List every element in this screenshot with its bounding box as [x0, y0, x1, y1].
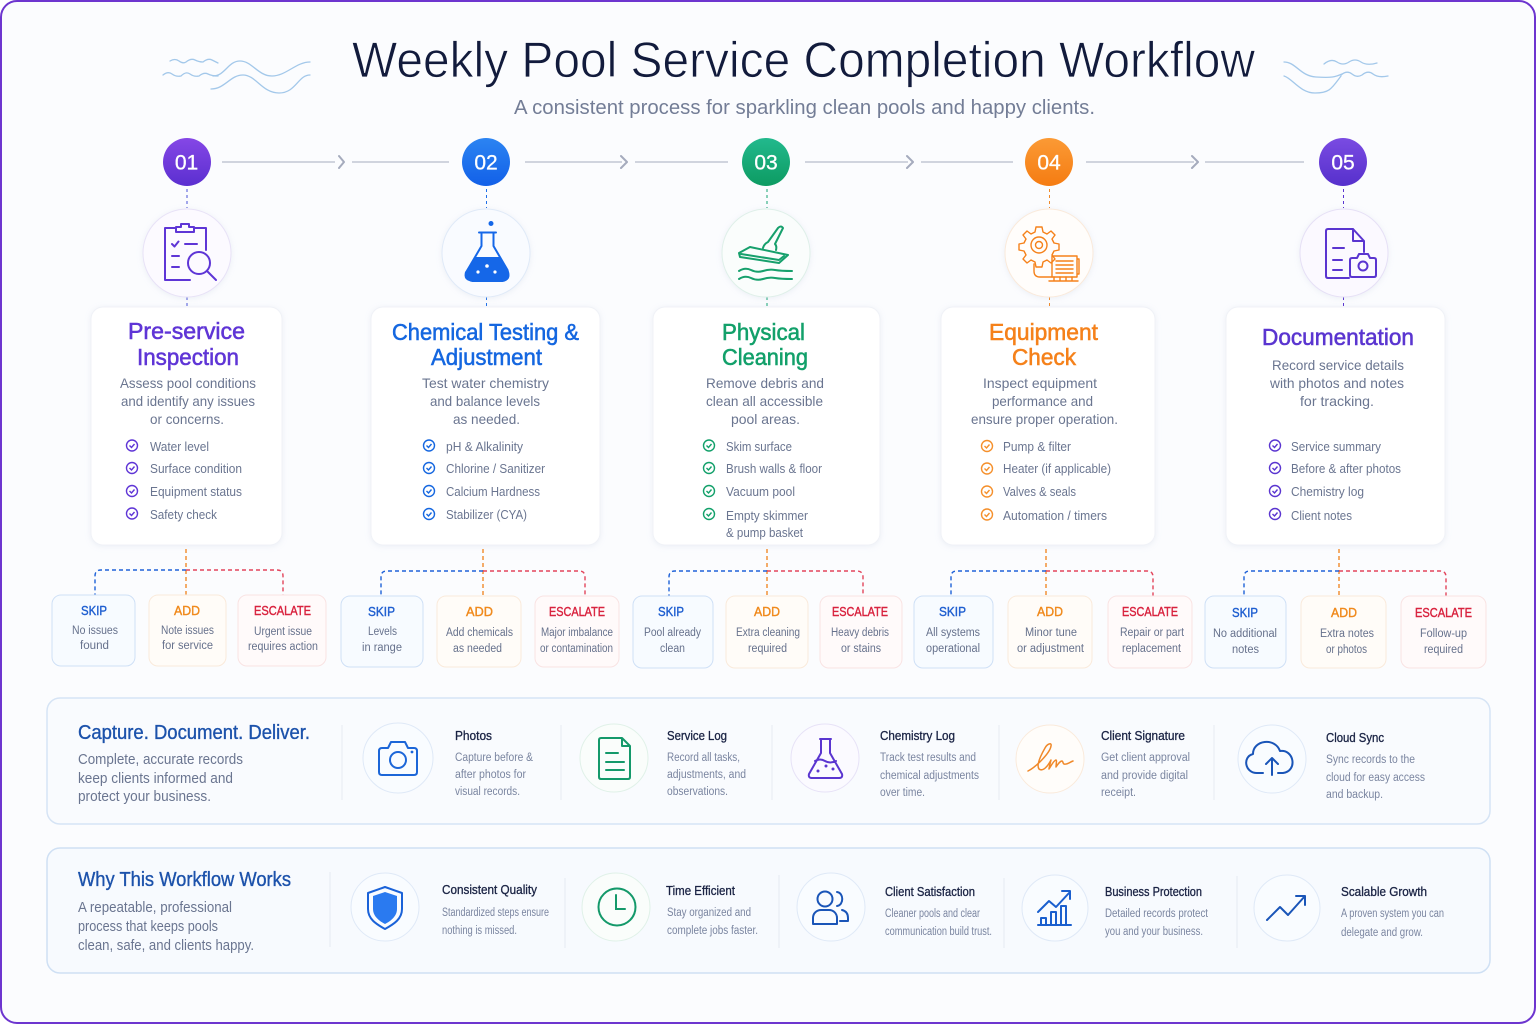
decision boxes step 01: for service [162, 640, 213, 652]
card: Physical Cleaning: Remove debris and [706, 375, 824, 391]
item: Time Efficient: complete jobs faster. [667, 925, 758, 937]
decision boxes step 02: or contamination [540, 643, 613, 655]
card: Documentation: Record service details [1272, 357, 1404, 373]
decision boxes step 01: found [80, 640, 109, 652]
decision boxes step 02: Levels [368, 626, 397, 638]
item: Chemistry Log: Chemistry Log [880, 729, 955, 743]
card: Equipment Check: ensure proper operation. [971, 411, 1118, 427]
decision boxes step 01: No issues [72, 625, 118, 637]
panel heading [78, 722, 310, 805]
item: Service Log: Service Log [667, 729, 727, 743]
item: Cloud Sync: Sync records to the [1326, 754, 1415, 766]
card: Equipment Check: Inspect equipment [983, 375, 1097, 391]
card: Equipment Check: Equipment [989, 319, 1099, 345]
decision boxes step 02: as needed [453, 643, 502, 655]
decision boxes step 03: required [748, 643, 787, 655]
decision boxes step 04 [914, 596, 1192, 668]
decision boxes step 05: ADD [1331, 606, 1357, 620]
decision boxes step 02: ESCALATE [549, 605, 605, 619]
item: Consistent Quality: Consistent Quality [442, 883, 538, 897]
item: Service Log: Record all tasks, [667, 752, 740, 764]
item: Chemistry Log: Track test results and [880, 752, 976, 764]
decision boxes step 05: Follow-up [1420, 628, 1467, 640]
card: Documentation: for tracking. [1300, 393, 1374, 409]
item: Client Signature: Get client approval [1101, 752, 1190, 764]
card: Equipment Check [941, 307, 1155, 545]
step 03 column [653, 138, 880, 545]
decision boxes step 05: notes [1232, 644, 1259, 656]
panel: Why This Workflow Works [47, 848, 1490, 973]
step 04 column [941, 138, 1155, 545]
icon: pool vacuum [722, 209, 810, 297]
card: Documentation: with photos and notes [1269, 375, 1404, 391]
card: Physical Cleaning: Vacuum pool [726, 485, 795, 499]
card: Equipment Check: Pump & filter [1003, 440, 1071, 454]
title: Weekly Pool Service Completion Workflow [352, 32, 1256, 88]
icon: flask [442, 209, 530, 297]
decision boxes step 05: No additional [1213, 628, 1277, 640]
panel heading: protect your business. [78, 789, 211, 805]
card: Pre-service Inspection: Pre-service [128, 318, 245, 344]
card: Chemical Testing & Adjustment: and balance levels [430, 393, 540, 409]
item: Chemistry Log [791, 724, 979, 799]
decision boxes step 01: requires action [248, 641, 318, 653]
card: Pre-service Inspection [91, 307, 282, 545]
decision boxes step 02: Add chemicals [446, 627, 513, 639]
panel heading: process that keeps pools [78, 919, 218, 935]
step number 01 [163, 138, 211, 186]
card: Chemical Testing & Adjustment: Chemical Testing & [392, 319, 579, 345]
card: Physical Cleaning: clean all accessible [706, 393, 823, 409]
card: Documentation: Client notes [1291, 509, 1352, 523]
card: Chemical Testing & Adjustment: as needed. [453, 411, 520, 427]
card: Physical Cleaning: & pump basket [726, 526, 803, 540]
icon: gear and pump [1005, 209, 1093, 297]
decision boxes step 02: in range [362, 642, 402, 654]
decision boxes step 03: Heavy debris [831, 627, 889, 639]
item: Business Protection: Business Protection [1105, 885, 1202, 899]
decision boxes step 04: SKIP [939, 605, 966, 619]
card: Documentation [1226, 307, 1445, 545]
decision boxes step 03 [633, 596, 902, 668]
item: Service Log [580, 724, 746, 798]
item: Scalable Growth: delegate and grow. [1341, 927, 1423, 939]
icon: document with camera [1300, 209, 1388, 297]
step 02 column [371, 138, 600, 545]
step number 03: 03 [754, 152, 778, 174]
decision boxes step 03: or stains [841, 643, 881, 655]
item: Cloud Sync [1238, 725, 1425, 801]
item: Business Protection [1022, 875, 1209, 941]
item: Time Efficient: Stay organized and [667, 907, 751, 919]
card: Documentation: Documentation [1262, 324, 1414, 350]
item: Client Satisfaction: Cleaner pools and clear [885, 908, 980, 920]
decision boxes step 01: Note issues [161, 625, 214, 637]
card: Physical Cleaning: pool areas. [731, 411, 800, 427]
card: Physical Cleaning: Physical [722, 319, 805, 345]
panel heading: keep clients informed and [78, 771, 233, 787]
item: Client Signature [1016, 725, 1190, 799]
card: Pre-service Inspection: Equipment status [150, 485, 242, 499]
decision boxes step 04: or adjustment [1017, 643, 1085, 655]
panel heading: A repeatable, professional [78, 900, 232, 916]
decision boxes step 05: required [1424, 644, 1463, 656]
decorative waves left [163, 59, 310, 93]
item: Scalable Growth: A proven system you can [1341, 908, 1444, 920]
card: Equipment Check: Heater (if applicable) [1003, 462, 1111, 476]
card: Pre-service Inspection: and identify any issues [121, 393, 255, 409]
decision boxes step 04: All systems [926, 627, 980, 639]
item: Client Satisfaction: Client Satisfaction [885, 885, 975, 899]
decision boxes step 05: ESCALATE [1415, 606, 1472, 620]
card: Pre-service Inspection: or concerns. [150, 411, 224, 427]
card: Physical Cleaning: Empty skimmer [726, 509, 808, 523]
step 05 column [1226, 138, 1445, 545]
decision boxes step 01 [52, 595, 326, 666]
panel heading: Capture. Document. Deliver. [78, 722, 310, 744]
card: Chemical Testing & Adjustment [371, 307, 600, 545]
subtitle: A consistent process for sparkling clean pools and happy clients. [514, 97, 1095, 119]
icon: clipboard inspection [143, 209, 231, 297]
decision boxes step 04: Repair or part [1120, 627, 1185, 639]
decorative waves right [1284, 60, 1388, 93]
card: Physical Cleaning: Cleaning [722, 344, 808, 370]
decision boxes step 05: Extra notes [1320, 628, 1374, 640]
card: Equipment Check: Valves & seals [1003, 485, 1076, 499]
item: Client Signature: receipt. [1101, 787, 1136, 799]
decision boxes step 03: ESCALATE [832, 605, 888, 619]
panel heading [78, 869, 291, 954]
card: Documentation: Service summary [1291, 440, 1382, 454]
panel heading: Complete, accurate records [78, 752, 243, 768]
panel: Capture. Document. Deliver. [47, 698, 1490, 824]
card: Chemical Testing & Adjustment: Adjustment [431, 344, 543, 370]
decision boxes step 04: Minor tune [1025, 627, 1077, 639]
item: Photos: after photos for [455, 769, 526, 781]
card: Chemical Testing & Adjustment: Test water chemistry [422, 375, 549, 391]
step number 02: 02 [474, 152, 498, 174]
card: Physical Cleaning [653, 307, 880, 545]
decision boxes step 03: Pool already [644, 627, 701, 639]
decision boxes step 02: SKIP [368, 605, 395, 619]
item: Client Signature: Client Signature [1101, 729, 1185, 743]
card: Pre-service Inspection: Water level [150, 440, 209, 454]
decision boxes step 04: ESCALATE [1122, 605, 1178, 619]
panel heading: Why This Workflow Works [78, 869, 291, 891]
step number 01: 01 [175, 152, 198, 174]
item: Service Log: adjustments, and [667, 769, 746, 781]
item: Cloud Sync: cloud for easy access [1326, 772, 1425, 784]
card: Physical Cleaning: Skim surface [726, 440, 792, 454]
decision boxes step 03: clean [660, 643, 685, 655]
panel heading: clean, safe, and clients happy. [78, 938, 254, 954]
item: Cloud Sync: Cloud Sync [1326, 731, 1384, 745]
step number 05: 05 [1331, 152, 1355, 174]
decision boxes step 03: ADD [754, 605, 780, 619]
card: Chemical Testing & Adjustment: Calcium Hardness [446, 485, 540, 499]
item: Business Protection: you and your business. [1105, 926, 1203, 938]
decision boxes step 05 [1205, 596, 1486, 668]
decision boxes step 02 [341, 596, 619, 667]
card: Equipment Check: Check [1012, 344, 1076, 370]
item: Chemistry Log: chemical adjustments [880, 770, 979, 782]
item: Scalable Growth [1254, 875, 1444, 941]
step number 03 [742, 138, 790, 186]
card: Physical Cleaning: Brush walls & floor [726, 462, 822, 476]
decision boxes step 04: operational [926, 643, 980, 655]
card: Pre-service Inspection: Safety check [150, 508, 218, 522]
decision boxes step 01: ESCALATE [254, 604, 311, 618]
decision boxes step 05: or photos [1326, 644, 1367, 656]
step number 04: 04 [1037, 152, 1061, 174]
item: Service Log: observations. [667, 786, 728, 798]
item: Time Efficient [582, 873, 758, 941]
item: Business Protection: Detailed records protect [1105, 908, 1209, 920]
card: Documentation: Before & after photos [1291, 462, 1401, 476]
item: Photos: Capture before & [455, 752, 533, 764]
decision boxes step 01: SKIP [81, 604, 107, 618]
step number 05 [1319, 138, 1367, 186]
step 01 column [91, 138, 282, 545]
item: Client Satisfaction: communication build trust. [885, 926, 992, 938]
item: Time Efficient: Time Efficient [666, 884, 735, 898]
item: Client Satisfaction [797, 873, 992, 941]
item: Photos: Photos [455, 729, 492, 743]
timeline arrows [222, 156, 1304, 168]
card: Equipment Check: Automation / timers [1003, 509, 1107, 523]
card: Chemical Testing & Adjustment: Stabilizer (CYA) [446, 508, 527, 522]
decision connectors [95, 549, 1446, 596]
card: Documentation: Chemistry log [1291, 485, 1364, 499]
item: Cloud Sync: and backup. [1326, 789, 1383, 801]
card: Pre-service Inspection: Inspection [137, 344, 239, 370]
decision boxes step 03: SKIP [658, 605, 684, 619]
step number 04 [1025, 138, 1073, 186]
card: Chemical Testing & Adjustment: Chlorine / Sanitizer [446, 462, 545, 476]
item: Consistent Quality: nothing is missed. [442, 925, 517, 937]
card: Chemical Testing & Adjustment: pH & Alkalinity [446, 440, 524, 454]
decision boxes step 02: Major imbalance [541, 627, 613, 639]
item: Chemistry Log: over time. [880, 787, 925, 799]
decision boxes step 04: replacement [1122, 643, 1182, 655]
item: Client Signature: and provide digital [1101, 770, 1188, 782]
decision boxes step 03: Extra cleaning [736, 627, 800, 639]
item: Consistent Quality: Standardized steps ensure [442, 907, 549, 919]
item: Consistent Quality [351, 873, 549, 941]
card: Pre-service Inspection: Surface condition [150, 462, 242, 476]
card: Pre-service Inspection: Assess pool conditions [120, 375, 256, 391]
item: Photos [363, 723, 533, 798]
decision boxes step 04: ADD [1037, 605, 1063, 619]
card: Equipment Check: performance and [992, 393, 1093, 409]
decision boxes step 01: Urgent issue [254, 626, 312, 638]
decision boxes step 02: ADD [466, 605, 493, 619]
decision boxes step 05: SKIP [1232, 606, 1258, 620]
item: Photos: visual records. [455, 786, 520, 798]
item: Scalable Growth: Scalable Growth [1341, 885, 1427, 899]
decision boxes step 01: ADD [174, 604, 200, 618]
step number 02 [462, 138, 510, 186]
